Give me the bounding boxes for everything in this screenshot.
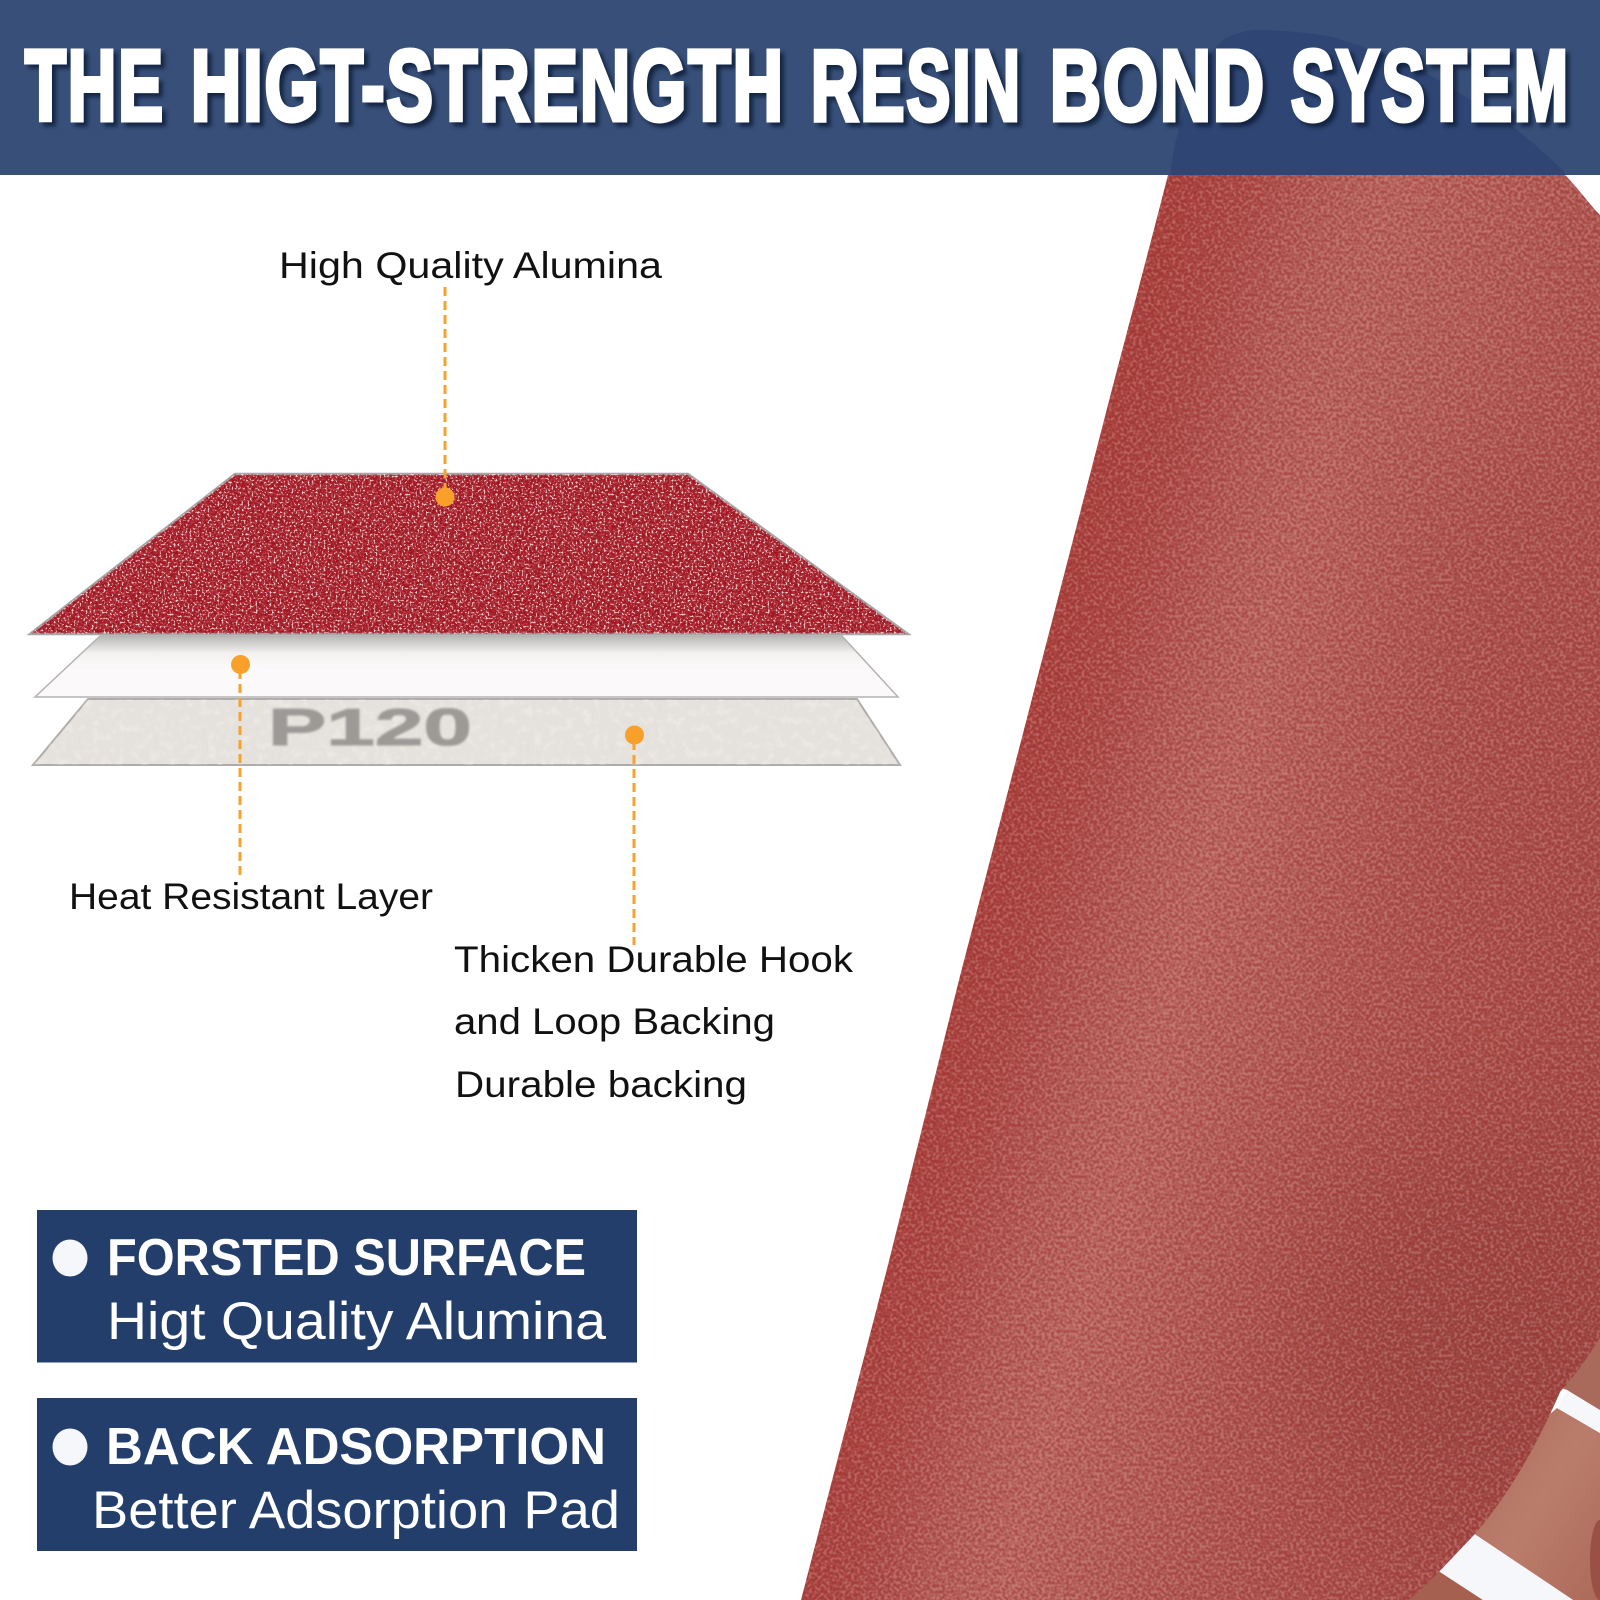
feature box: back adsorption: BACK ADSORPTION	[106, 1418, 606, 1476]
callout: Thicken Durable Hook and Loop Backing: Durable backing	[455, 1064, 747, 1105]
callout: High Quality Alumina	[279, 245, 662, 506]
callout: High Quality Alumina: High Quality Alumina	[279, 245, 662, 286]
callout: Thicken Durable Hook and Loop Backing	[454, 726, 854, 1105]
layer: backing printed P120	[30, 698, 905, 766]
callout: Heat Resistant Layer: Heat Resistant Layer	[69, 876, 433, 917]
sandpaper sheet surface	[780, 170, 1600, 1600]
title text: THE	[25, 30, 165, 142]
feature box: back adsorption	[37, 1398, 637, 1551]
product photo: sandpaper sheet held by a hand	[780, 170, 1600, 1600]
title text: HIGT-STRENGTH	[191, 30, 785, 142]
backing print mark: P120	[268, 699, 472, 757]
layer: red alumina abrasive	[20, 470, 920, 640]
callout: Heat Resistant Layer	[69, 655, 433, 917]
feature box: back adsorption: Better Adsorption Pad	[92, 1481, 620, 1540]
white gaps between fingers	[1437, 1390, 1600, 1600]
callout: Thicken Durable Hook and Loop Backing: and Loop Backing	[454, 1001, 775, 1042]
layer: heat resistant white	[35, 636, 898, 697]
feature box: forsted surface: FORSTED SURFACE	[107, 1229, 586, 1287]
hand behind the sheet	[1410, 1320, 1600, 1600]
feature box: forsted surface: Higt Quality Alumina	[107, 1292, 607, 1351]
title text: BOND	[1050, 30, 1266, 142]
title text	[25, 30, 1570, 142]
callout: Thicken Durable Hook and Loop Backing: Thicken Durable Hook	[454, 939, 854, 980]
title text: RESIN	[811, 30, 1022, 142]
feature box: forsted surface	[37, 1210, 637, 1362]
title banner	[0, 0, 1600, 175]
sheet corner showing through the banner	[1170, 30, 1567, 175]
layered diagram: sandpaper structure	[20, 470, 920, 766]
